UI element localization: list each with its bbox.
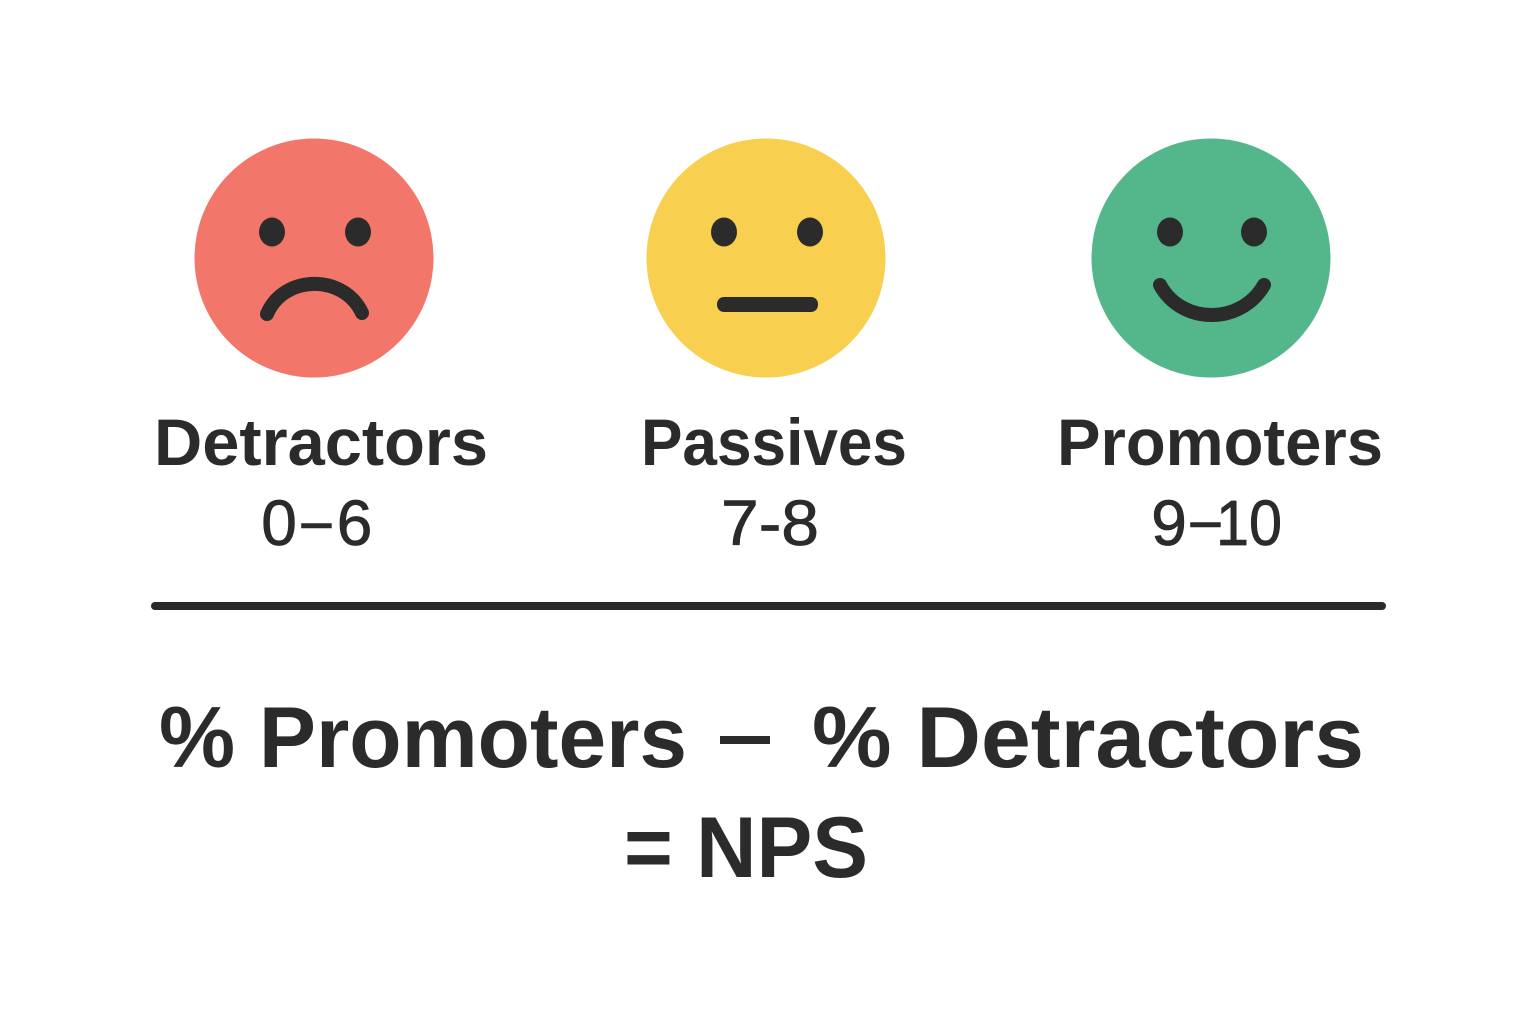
label: passives: 7-8	[721, 487, 819, 559]
label: passives	[641, 405, 907, 559]
divider line	[151, 602, 1386, 610]
label: detractors: 6	[337, 487, 372, 559]
label: passives: Passives	[641, 405, 907, 479]
label: promoters: 10	[1216, 487, 1282, 559]
formula: % Promoters	[159, 690, 687, 786]
label: detractors	[154, 405, 488, 559]
icon: happy face	[1092, 138, 1330, 378]
label: detractors: Detractors	[154, 405, 488, 479]
formula	[159, 690, 1364, 896]
label: promoters: Promoters	[1057, 405, 1383, 479]
icon: sad face	[194, 138, 434, 378]
label: promoters	[1057, 405, 1383, 559]
formula: = NPS	[624, 800, 868, 896]
label: promoters: –	[1191, 492, 1220, 550]
icon: neutral face	[646, 138, 886, 378]
label: detractors: –	[302, 493, 331, 551]
formula: % Detractors	[812, 690, 1364, 786]
label: detractors: 0	[261, 487, 297, 559]
label: promoters: 9	[1151, 487, 1187, 559]
